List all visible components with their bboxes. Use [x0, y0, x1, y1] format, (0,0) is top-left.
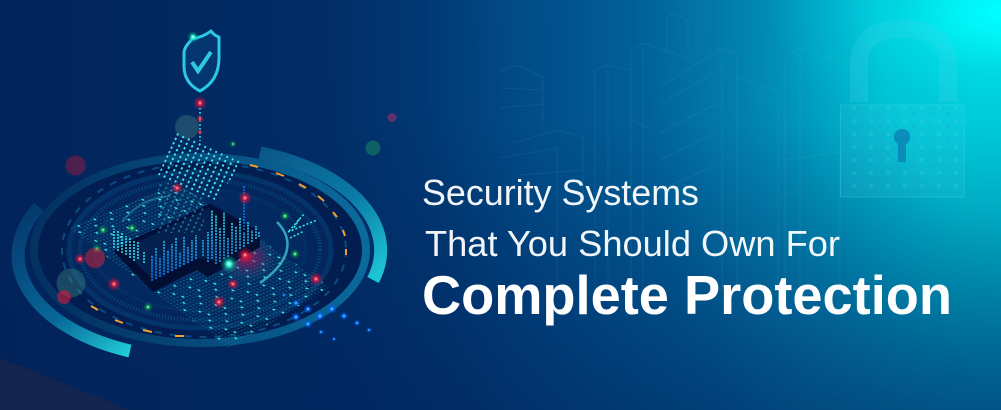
shield icon — [184, 31, 219, 91]
orange dashes — [91, 165, 346, 336]
title line 2: That You Should Own For — [425, 223, 840, 264]
title line 1: Security Systems — [422, 172, 699, 213]
front wall bars — [152, 210, 259, 281]
building top — [125, 207, 216, 280]
title line 3: Complete Protection — [422, 264, 952, 326]
inner rings — [62, 163, 346, 337]
fine dot grid — [70, 184, 329, 348]
bokeh circles — [66, 113, 396, 190]
bright dot grid — [77, 186, 324, 345]
right outer arc band — [260, 153, 381, 280]
glow lights — [74, 96, 372, 342]
keyhole — [894, 129, 910, 162]
title — [422, 172, 952, 326]
foreground bokeh circles — [56, 248, 105, 304]
left wall bars — [114, 229, 144, 263]
connector dots — [199, 108, 201, 141]
lock texture — [841, 106, 964, 197]
floating dot panel — [158, 133, 243, 200]
lock body — [840, 105, 964, 197]
shield glow — [187, 31, 199, 43]
building body — [115, 205, 260, 292]
left outer arc band — [18, 207, 130, 351]
check mark — [192, 52, 211, 71]
security disc — [18, 153, 381, 355]
padlock watermark — [840, 29, 964, 197]
isometric building — [114, 183, 260, 292]
right floating dot lines — [288, 214, 317, 238]
cyan inner arc — [260, 222, 287, 283]
vertical blue beam — [243, 186, 245, 230]
building edge — [137, 205, 258, 241]
rear dot column — [158, 183, 204, 233]
lock shackle — [859, 29, 948, 102]
bottom-left corner shape — [0, 358, 130, 410]
background wireframe buildings — [500, 14, 840, 290]
disc ring — [34, 157, 366, 343]
red haze — [217, 234, 277, 282]
faint inner arc — [122, 196, 170, 222]
shield outline — [184, 31, 219, 91]
